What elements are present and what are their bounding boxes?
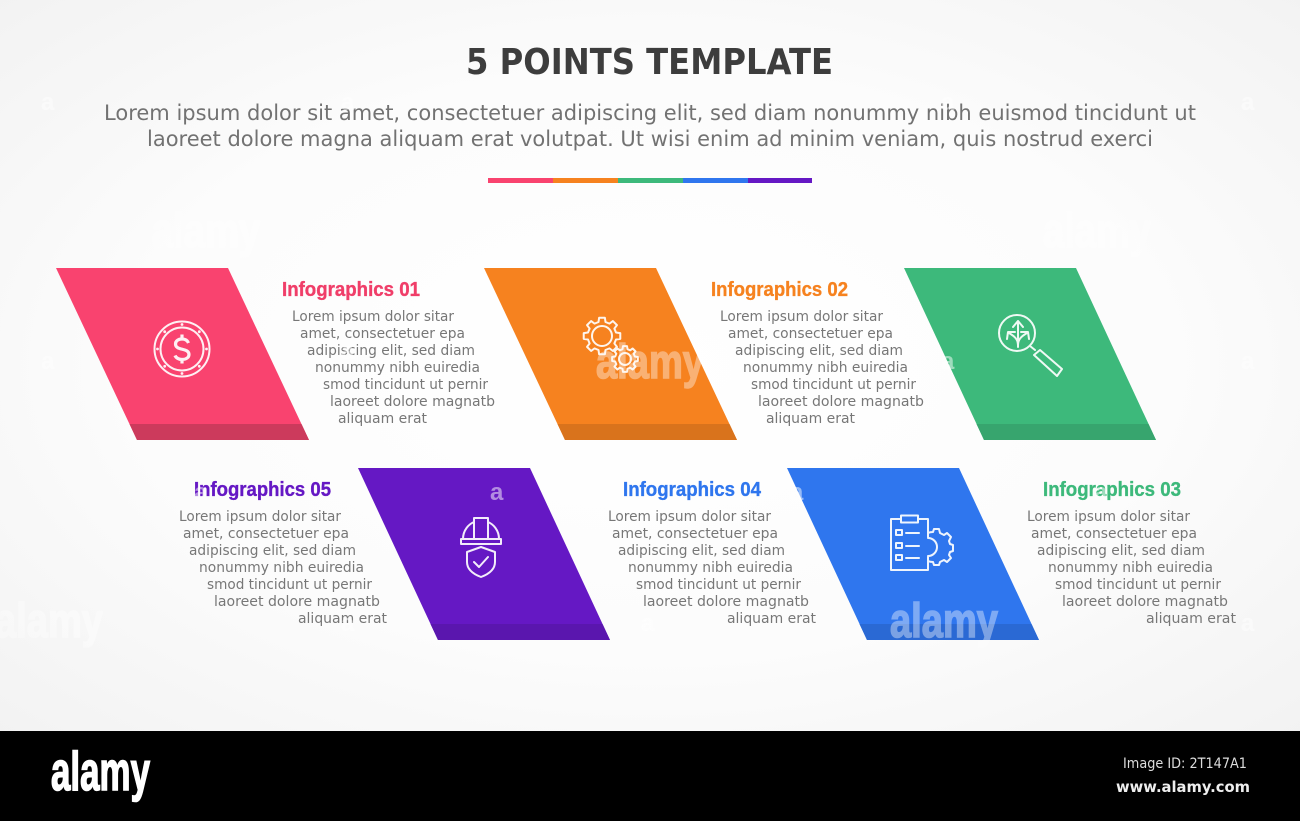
text block: adipiscing elit, sed diam xyxy=(618,543,785,559)
heading: Infographics 01 xyxy=(282,279,420,301)
text block: aliquam erat xyxy=(1146,611,1237,627)
heading: Infographics 05 xyxy=(194,479,331,501)
colour divider xyxy=(488,178,812,183)
watermarks xyxy=(0,89,1255,648)
icon: helmet and shield xyxy=(461,518,501,577)
text block: nonummy nibh euiredia xyxy=(628,560,793,576)
panel: infographics 05 xyxy=(179,468,610,640)
footer logo: alamy xyxy=(51,740,150,802)
footer image id: Image ID: 2T147A1 xyxy=(1123,756,1247,772)
text block: Lorem ipsum dolor sitar xyxy=(1027,509,1190,525)
text block: adipiscing elit, sed diam xyxy=(735,343,903,359)
watermarks: a xyxy=(641,610,655,637)
watermarks: a xyxy=(1241,348,1255,375)
watermarks: alamy xyxy=(152,205,260,258)
text block: adipiscing elit, sed diam xyxy=(189,543,356,559)
text block: nonummy nibh euiredia xyxy=(1048,560,1213,576)
watermarks: a xyxy=(194,479,208,506)
text block xyxy=(608,509,816,627)
text block: Lorem ipsum dolor sitar xyxy=(179,509,341,525)
text block: aliquam erat xyxy=(338,411,427,427)
watermarks: a xyxy=(1241,89,1255,116)
watermarks: a xyxy=(1094,479,1108,506)
text block xyxy=(179,509,387,627)
watermarks: alamy xyxy=(596,336,704,389)
text block: amet, consectetuer epa xyxy=(300,326,465,342)
text block: nonummy nibh euiredia xyxy=(199,560,364,576)
text block: smod tincidunt ut pernir xyxy=(207,577,372,593)
heading: Infographics 03 xyxy=(1043,479,1181,501)
footer url: www.alamy.com xyxy=(1116,778,1250,796)
watermarks: a xyxy=(490,479,504,506)
watermarks: alamy xyxy=(1043,205,1151,258)
panel: infographics 01 xyxy=(56,268,495,440)
text block: amet, consectetuer epa xyxy=(612,526,778,542)
text block: laoreet dolore magnatb xyxy=(214,594,380,610)
footer bar xyxy=(0,731,1300,821)
watermarks: a xyxy=(41,348,55,375)
heading: Infographics 02 xyxy=(711,279,848,301)
watermarks: a xyxy=(1241,610,1255,637)
text block: smod tincidunt ut pernir xyxy=(751,377,916,393)
text block: adipiscing elit, sed diam xyxy=(1037,543,1205,559)
watermarks: a xyxy=(790,479,804,506)
text block: smod tincidunt ut pernir xyxy=(323,377,488,393)
icon: clipboard with gear xyxy=(891,516,953,570)
text block: amet, consectetuer epa xyxy=(183,526,349,542)
panel: infographics 03 xyxy=(904,268,1237,627)
text block: amet, consectetuer epa xyxy=(728,326,893,342)
text block xyxy=(292,309,495,427)
text block: smod tincidunt ut pernir xyxy=(636,577,801,593)
watermarks: a xyxy=(41,89,55,116)
heading: Infographics 04 xyxy=(623,479,762,501)
text block: laoreet dolore magnatb xyxy=(1062,594,1228,610)
watermarks: a xyxy=(341,610,355,637)
text block: smod tincidunt ut pernir xyxy=(1055,577,1221,593)
text block: nonummy nibh euiredia xyxy=(743,360,908,376)
watermarks: a xyxy=(341,338,355,365)
text block: aliquam erat xyxy=(298,611,387,627)
text block: laoreet dolore magnatb xyxy=(330,394,495,410)
watermarks: a xyxy=(341,89,355,116)
watermarks: a xyxy=(941,89,955,116)
subtitle text xyxy=(104,101,1196,152)
icon: gears xyxy=(584,318,638,372)
text block: adipiscing elit, sed diam xyxy=(307,343,475,359)
panel: infographics 04 xyxy=(608,468,1039,640)
watermarks: a xyxy=(941,348,955,375)
text block: amet, consectetuer epa xyxy=(1031,526,1197,542)
text block: laoreet dolore magnatb xyxy=(758,394,924,410)
subtitle text: laoreet dolore magna aliquam erat volutpat. Ut wisi enim ad minim veniam, quis nostrud exerci xyxy=(147,127,1153,152)
text block: aliquam erat xyxy=(727,611,816,627)
text block: Lorem ipsum dolor sitar xyxy=(292,309,454,325)
text block: Lorem ipsum dolor sitar xyxy=(608,509,771,525)
panel: infographics 02 xyxy=(484,268,924,440)
icon: magnifier with arrows xyxy=(999,315,1062,376)
text block: Lorem ipsum dolor sitar xyxy=(720,309,883,325)
watermarks: alamy xyxy=(890,595,998,648)
subtitle text: Lorem ipsum dolor sit amet, consectetuer adipiscing elit, sed diam nonummy nibh euismod tincidunt ut xyxy=(104,101,1196,126)
text block: aliquam erat xyxy=(766,411,855,427)
text block: laoreet dolore magnatb xyxy=(643,594,809,610)
icon: dollar coin xyxy=(154,322,210,376)
text block: nonummy nibh euiredia xyxy=(315,360,480,376)
text block xyxy=(1027,509,1237,627)
text block xyxy=(720,309,924,427)
title: 5 POINTS TEMPLATE xyxy=(466,42,833,83)
